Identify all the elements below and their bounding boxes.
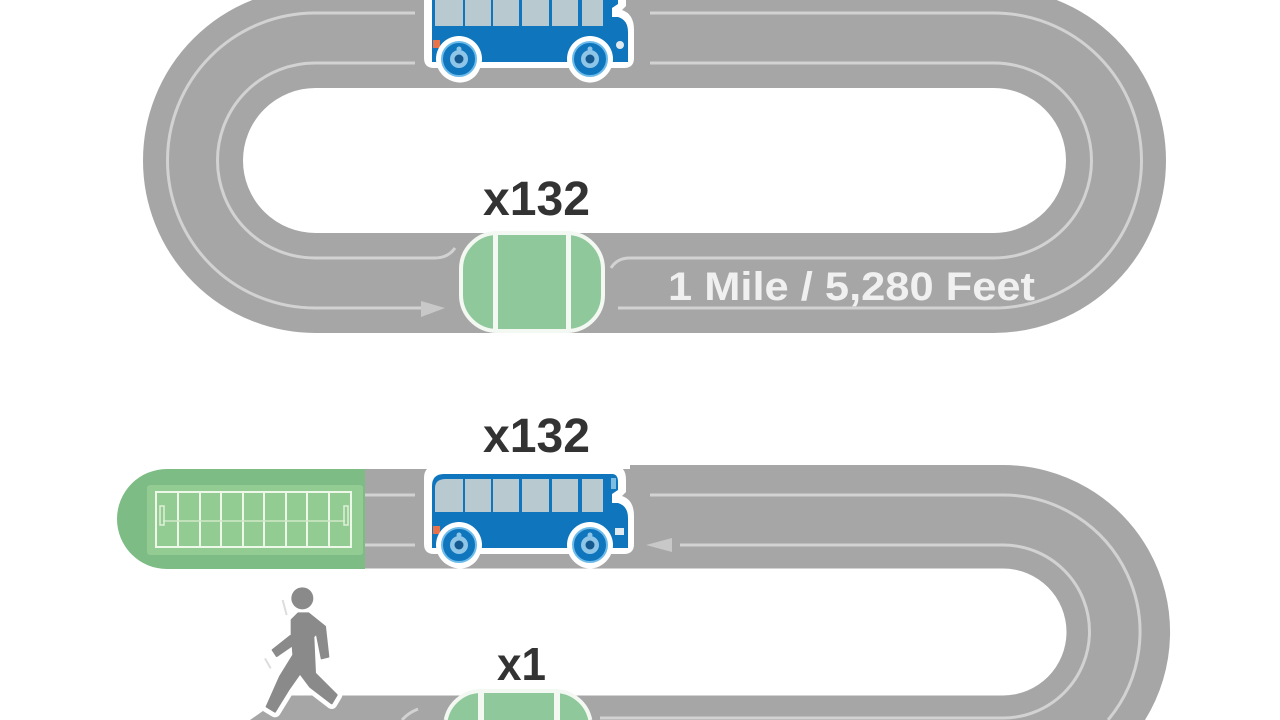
panel: upper one-mile track [168, 0, 1142, 331]
panel: lower track [117, 410, 1170, 720]
lower track lane lines [365, 495, 1140, 720]
icon: football field end view, upper track [461, 233, 603, 331]
multiplier label: x132 fields: x132 [483, 173, 590, 226]
icon: football field on track [117, 469, 365, 569]
arrow: upper track direction [421, 301, 445, 317]
icon: school bus, upper track [424, 0, 634, 83]
icon: school bus, lower track [424, 466, 634, 569]
upper track lane lines [168, 13, 1142, 308]
lower track road [250, 465, 1170, 720]
icon: walking person [265, 587, 337, 712]
icon: football field end view, lower track [446, 691, 590, 720]
upper track road [193, 38, 1116, 283]
multiplier label: x132 buses: x132 [483, 410, 590, 463]
multiplier label: x1 field: x1 [497, 638, 546, 690]
distance label: 1 Mile / 5,280 Feet [668, 265, 1035, 309]
arrow: lower track direction [646, 538, 672, 552]
